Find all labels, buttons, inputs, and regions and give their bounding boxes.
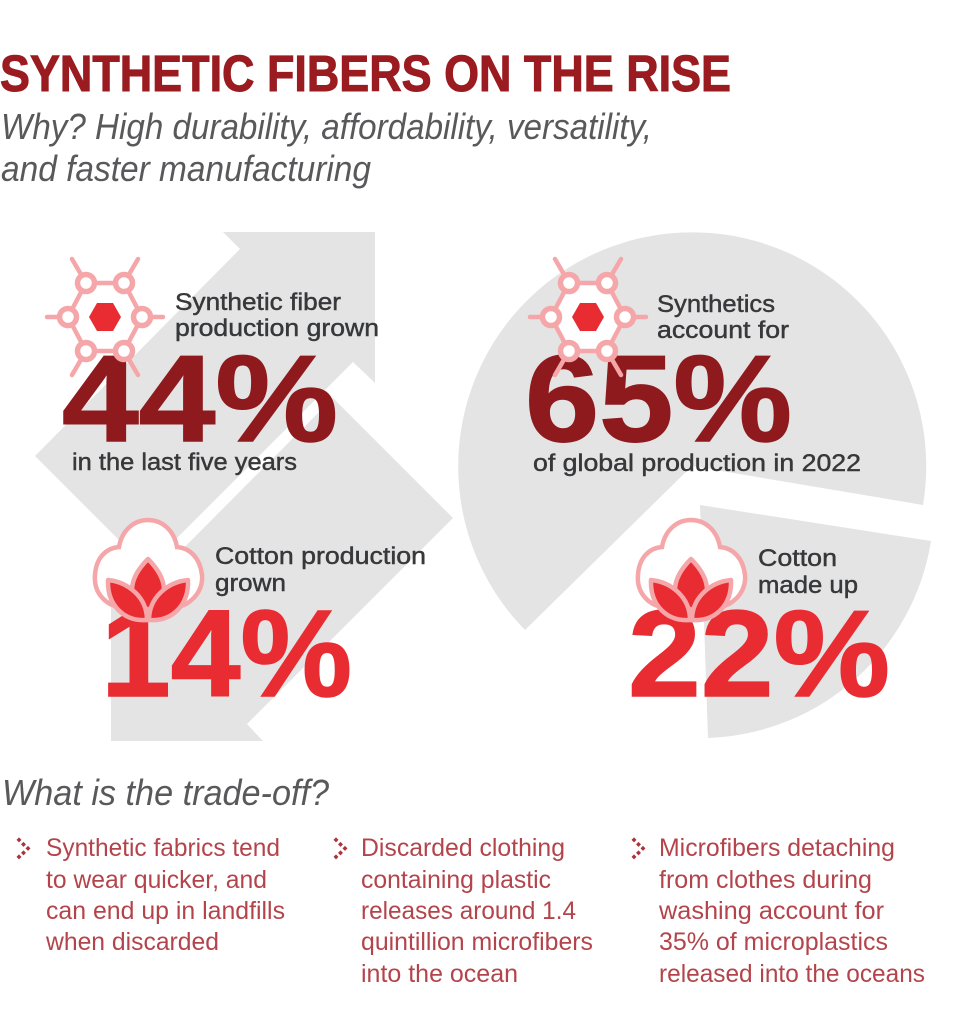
- number: 44%: 44%: [62, 331, 338, 468]
- label: synthetics account for: account for: [657, 317, 789, 344]
- text block: trade-off three: washing account for: [658, 897, 884, 925]
- label: synthetics account for: [657, 291, 789, 344]
- label: synthetic fiber production: production grown: [175, 315, 379, 342]
- label: cotton made up: Cotton: [758, 545, 837, 572]
- subtitle: [1, 106, 652, 189]
- text block: trade-off three: Microfibers detaching: [659, 834, 895, 862]
- text block: trade-off one: when discarded: [45, 928, 219, 956]
- label: cotton production grown: grown: [215, 570, 286, 597]
- label: of global production in 2022: of global production in 2022: [533, 450, 861, 477]
- panel: synthetics share stat: [525, 259, 861, 477]
- label: synthetics account for: Synthetics: [657, 291, 775, 318]
- text block: trade-off one: to wear quicker, and: [46, 866, 267, 894]
- label: synthetic fiber production: Synthetic fiber: [175, 289, 341, 316]
- panel: cotton share stat: [628, 520, 890, 723]
- text block: trade-off three: 35% of microplastics: [659, 928, 888, 956]
- chart: rising synthetic arrow: [35, 232, 375, 568]
- text block: trade-off two: quintillion microfibers: [361, 928, 593, 956]
- text block: trade-off one: Synthetic fabrics tend: [46, 834, 280, 862]
- number: 22%: 22%: [628, 586, 890, 723]
- icon: bullet chevron: [632, 837, 645, 859]
- text block: trade-off three: released into the oceans: [659, 960, 925, 988]
- panel: synthetic production stat: [47, 259, 379, 476]
- subtitle: Why? High durability, affordability, versatility,: [1, 106, 652, 147]
- icon: cotton boll: [638, 520, 745, 620]
- number: 14%: 14%: [101, 586, 352, 723]
- chart: pie cotton segment: [700, 505, 931, 738]
- text block: trade-off two: into the ocean: [361, 960, 518, 988]
- chart: pie large segment synthetics: [458, 232, 926, 630]
- text block: trade-off one: can end up in landfills: [46, 897, 285, 925]
- panel: cotton production stat: [95, 520, 426, 723]
- text block: trade-off two: Discarded clothing: [361, 834, 565, 862]
- text block: trade-off two: containing plastic: [361, 866, 551, 894]
- label: cotton made up: made up: [758, 572, 858, 599]
- heading: trade-off: What is the trade-off?: [2, 772, 329, 813]
- label: in the last five years: in the last five years: [72, 449, 297, 476]
- chart: falling cotton arrow: [111, 398, 453, 741]
- text block: trade-off three: from clothes during: [659, 866, 872, 894]
- subtitle: and faster manufacturing: [1, 148, 371, 189]
- icon: bullet chevron: [17, 837, 30, 859]
- label: cotton production grown: [215, 543, 426, 597]
- label: synthetic fiber production: [175, 289, 379, 342]
- label: cotton production grown: Cotton production: [215, 543, 426, 570]
- text block: trade-off three: [632, 834, 925, 988]
- text block: trade-off one: [17, 834, 285, 956]
- text block: trade-off two: releases around 1.4: [361, 897, 576, 925]
- icon: molecule: [47, 259, 163, 375]
- title: SYNTHETIC FIBERS ON THE RISE: [0, 45, 731, 102]
- number: 65%: 65%: [525, 331, 792, 468]
- label: cotton made up: [758, 545, 858, 599]
- text block: trade-off two: [334, 834, 593, 988]
- icon: bullet chevron: [334, 837, 347, 859]
- icon: cotton boll: [95, 520, 202, 620]
- icon: molecule: [530, 259, 646, 375]
